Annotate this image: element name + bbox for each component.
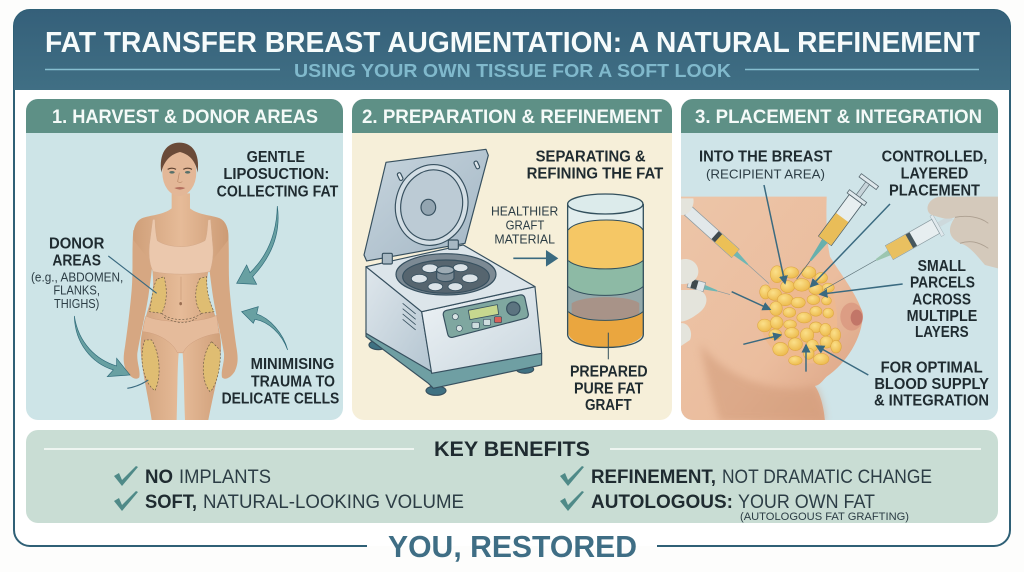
label: healthier graft material: HEALTHIER	[491, 204, 558, 218]
callout: donor areas: THIGHS)	[54, 297, 99, 311]
callout: minimising trauma: TRAUMA TO	[251, 373, 335, 390]
callout: small parcels: ACROSS	[912, 291, 971, 308]
benefit: autologous	[560, 491, 909, 523]
illustration: breast with fat parcels	[680, 174, 998, 422]
arrow: to graft cylinder	[513, 250, 558, 267]
panel: key benefits	[26, 430, 998, 523]
illustration: centrifuge	[364, 149, 542, 395]
panel: preparation and refinement	[352, 99, 672, 420]
title: FAT TRANSFER BREAST AUGMENTATION: A NATURAL REFINEMENT	[45, 27, 980, 59]
callout: donor areas: DONOR	[49, 236, 104, 253]
heading: key benefits: KEY BENEFITS	[434, 438, 590, 461]
callout: gentle liposuction: COLLECTING FAT	[217, 183, 339, 200]
callout: gentle liposuction: GENTLE	[247, 149, 305, 166]
callout: minimising trauma	[222, 356, 339, 408]
callout: gentle liposuction: LIPOSUCTION:	[223, 166, 329, 183]
syringe: top	[796, 173, 879, 280]
heading: step 3: 3. PLACEMENT & INTEGRATION	[695, 106, 982, 128]
callout: donor areas: FLANKS,	[53, 284, 100, 298]
callout: into the breast: (RECIPIENT AREA)	[706, 167, 825, 182]
label: separating and refining: REFINING THE FAT	[527, 166, 664, 183]
label: prepared pure fat graft: PREPARED	[570, 364, 648, 381]
arrows: harvest callouts	[74, 206, 288, 388]
callout: small parcels: PARCELS	[910, 275, 975, 292]
callout: blood supply: & INTEGRATION	[874, 393, 989, 410]
benefit: autologous: AUTOLOGOUS:	[591, 492, 733, 513]
illustration: woman with marked donor areas	[124, 143, 238, 420]
benefit: soft natural-looking volume: NATURAL-LOOKING VOLUME	[203, 492, 464, 513]
benefit: autologous: (AUTOLOGOUS FAT GRAFTING)	[740, 511, 909, 523]
label: healthier graft material: GRAFT	[506, 218, 545, 232]
callout: into the breast: INTO THE BREAST	[699, 149, 833, 166]
callout: minimising trauma: MINIMISING	[251, 356, 334, 373]
gloved hands	[680, 198, 706, 347]
heading: step 1: 1. HARVEST & DONOR AREAS	[52, 106, 318, 128]
subtitle: USING YOUR OWN TISSUE FOR A SOFT LOOK	[294, 60, 732, 81]
benefit: no implants: IMPLANTS	[179, 467, 271, 488]
label: healthier graft material	[491, 204, 558, 247]
callout: small parcels: MULTIPLE	[907, 308, 977, 325]
label: prepared pure fat graft	[570, 364, 648, 414]
callout: small parcels: SMALL	[918, 258, 966, 275]
benefit: no implants: NO	[145, 467, 173, 488]
footer: you, restored: YOU, RESTORED	[388, 529, 637, 564]
panel: harvest and donor areas	[26, 99, 343, 420]
benefit: no implants	[114, 466, 271, 488]
callout: donor areas	[31, 236, 123, 311]
label: separating and refining	[527, 149, 664, 183]
syringe: left upper	[685, 207, 773, 288]
header banner	[14, 10, 1010, 90]
callout: controlled layered placement: LAYERED	[901, 166, 968, 183]
benefit: refinement: NOT DRAMATIC CHANGE	[722, 467, 932, 488]
label: separating and refining: SEPARATING &	[536, 149, 646, 166]
syringe: left lower	[686, 280, 730, 295]
label: prepared pure fat graft: GRAFT	[585, 397, 632, 414]
callout: controlled layered placement: PLACEMENT	[889, 183, 980, 200]
callout: minimising trauma: DELICATE CELLS	[222, 391, 339, 408]
heading: step 2: 2. PREPARATION & REFINEMENT	[362, 106, 662, 128]
illustration: separated fat cylinder	[568, 194, 643, 359]
callout: controlled layered placement: CONTROLLED,	[882, 149, 987, 166]
callout: donor areas: AREAS	[52, 252, 101, 269]
panel: placement and integration	[680, 99, 998, 422]
benefit: soft natural-looking volume: SOFT,	[145, 492, 197, 513]
benefit: refinement	[560, 466, 932, 488]
callout: small parcels: LAYERS	[915, 324, 969, 341]
benefit: refinement: REFINEMENT,	[591, 467, 716, 488]
callout: into the breast	[699, 149, 833, 182]
callout: blood supply: FOR OPTIMAL	[881, 359, 983, 376]
benefit: autologous: YOUR OWN FAT	[738, 492, 875, 513]
label: prepared pure fat graft: PURE FAT	[574, 380, 644, 397]
callout: donor areas: (e.g., ABDOMEN,	[31, 271, 123, 285]
callout: controlled layered placement	[882, 149, 987, 200]
syringe: right	[824, 215, 952, 290]
label: healthier graft material: MATERIAL	[494, 233, 555, 247]
callout: blood supply: BLOOD SUPPLY	[874, 376, 989, 393]
arrows: placement callouts	[732, 185, 903, 375]
callout: blood supply	[874, 359, 989, 410]
callout: small parcels	[907, 258, 977, 341]
callout: gentle liposuction	[217, 149, 339, 200]
